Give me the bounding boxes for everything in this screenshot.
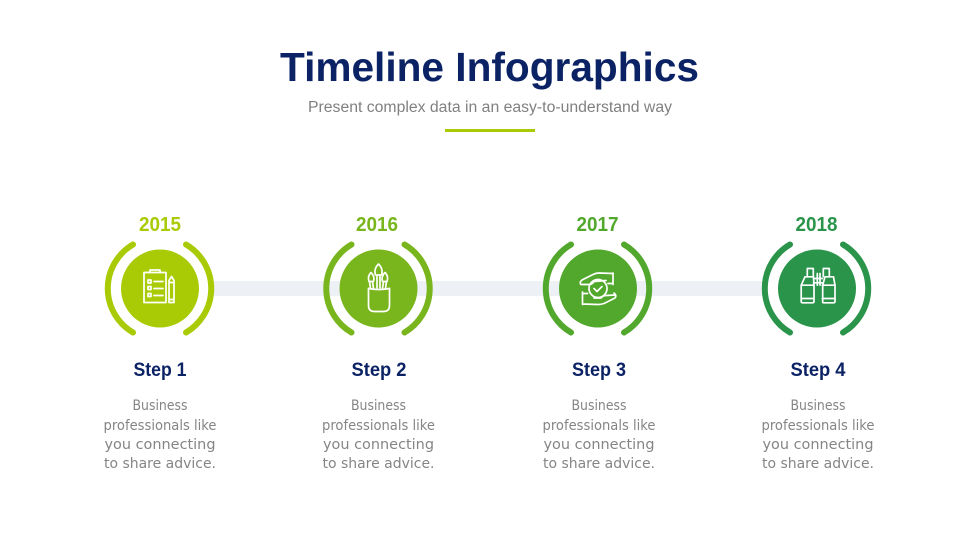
circle — [778, 250, 856, 328]
step 2 description — [322, 398, 435, 472]
step 4 description: you connecting — [762, 437, 874, 453]
step 3 heading: Step 3 — [572, 360, 626, 381]
step 2 description: to share advice. — [322, 456, 434, 472]
step 3 description: to share advice. — [543, 456, 655, 472]
icon: binoculars — [801, 268, 835, 303]
timeline connector bar — [212, 281, 765, 296]
step 1 description: to share advice. — [104, 456, 216, 472]
step 1 description — [104, 398, 217, 472]
step 4 heading: Step 4 — [790, 360, 846, 381]
year 2015: 2015 — [139, 214, 181, 236]
step 1 description: Business — [132, 398, 188, 414]
step 2 heading: Step 2 — [352, 360, 406, 381]
bracket arcs — [765, 244, 868, 332]
step 2 description: professionals like — [322, 418, 435, 434]
step 4 node — [765, 244, 868, 332]
step 1 node — [108, 244, 211, 332]
icon: clipboard and pencil — [144, 270, 174, 302]
step 2 description: Business — [351, 398, 406, 414]
icon: hands around check mark — [580, 273, 616, 304]
year 2018: 2018 — [796, 214, 838, 236]
step 4 description — [762, 398, 875, 472]
circle — [559, 250, 637, 328]
step 3 description — [542, 398, 656, 472]
step 4 description: to share advice. — [762, 456, 874, 472]
step 1 description: you connecting — [104, 437, 216, 453]
step 1 description: professionals like — [104, 418, 217, 434]
step 2 description: you connecting — [323, 437, 434, 453]
circle — [121, 250, 199, 328]
icon: brushes in a cup — [368, 264, 390, 312]
bracket arcs — [326, 244, 430, 332]
step 1 column — [104, 214, 217, 472]
step 3 description: you connecting — [544, 437, 654, 453]
step 4 column — [762, 214, 875, 472]
step 2 node — [326, 244, 430, 332]
title: Timeline Infographics — [280, 44, 699, 90]
year 2017: 2017 — [576, 214, 618, 236]
subtitle: Present complex data in an easy-to-understand way — [308, 99, 672, 116]
step 1 heading: Step 1 — [134, 360, 187, 381]
title underline — [445, 129, 535, 132]
step 4 description: professionals like — [762, 418, 875, 434]
step 3 description: Business — [572, 398, 626, 414]
bracket arcs — [108, 244, 211, 332]
step 4 description: Business — [790, 398, 846, 414]
step 3 column — [542, 214, 656, 472]
step 3 node — [546, 244, 649, 332]
circle — [340, 250, 418, 328]
step 3 description: professionals like — [542, 418, 656, 434]
bracket arcs — [546, 244, 649, 332]
year 2016: 2016 — [356, 214, 398, 236]
step 2 column — [322, 214, 435, 472]
